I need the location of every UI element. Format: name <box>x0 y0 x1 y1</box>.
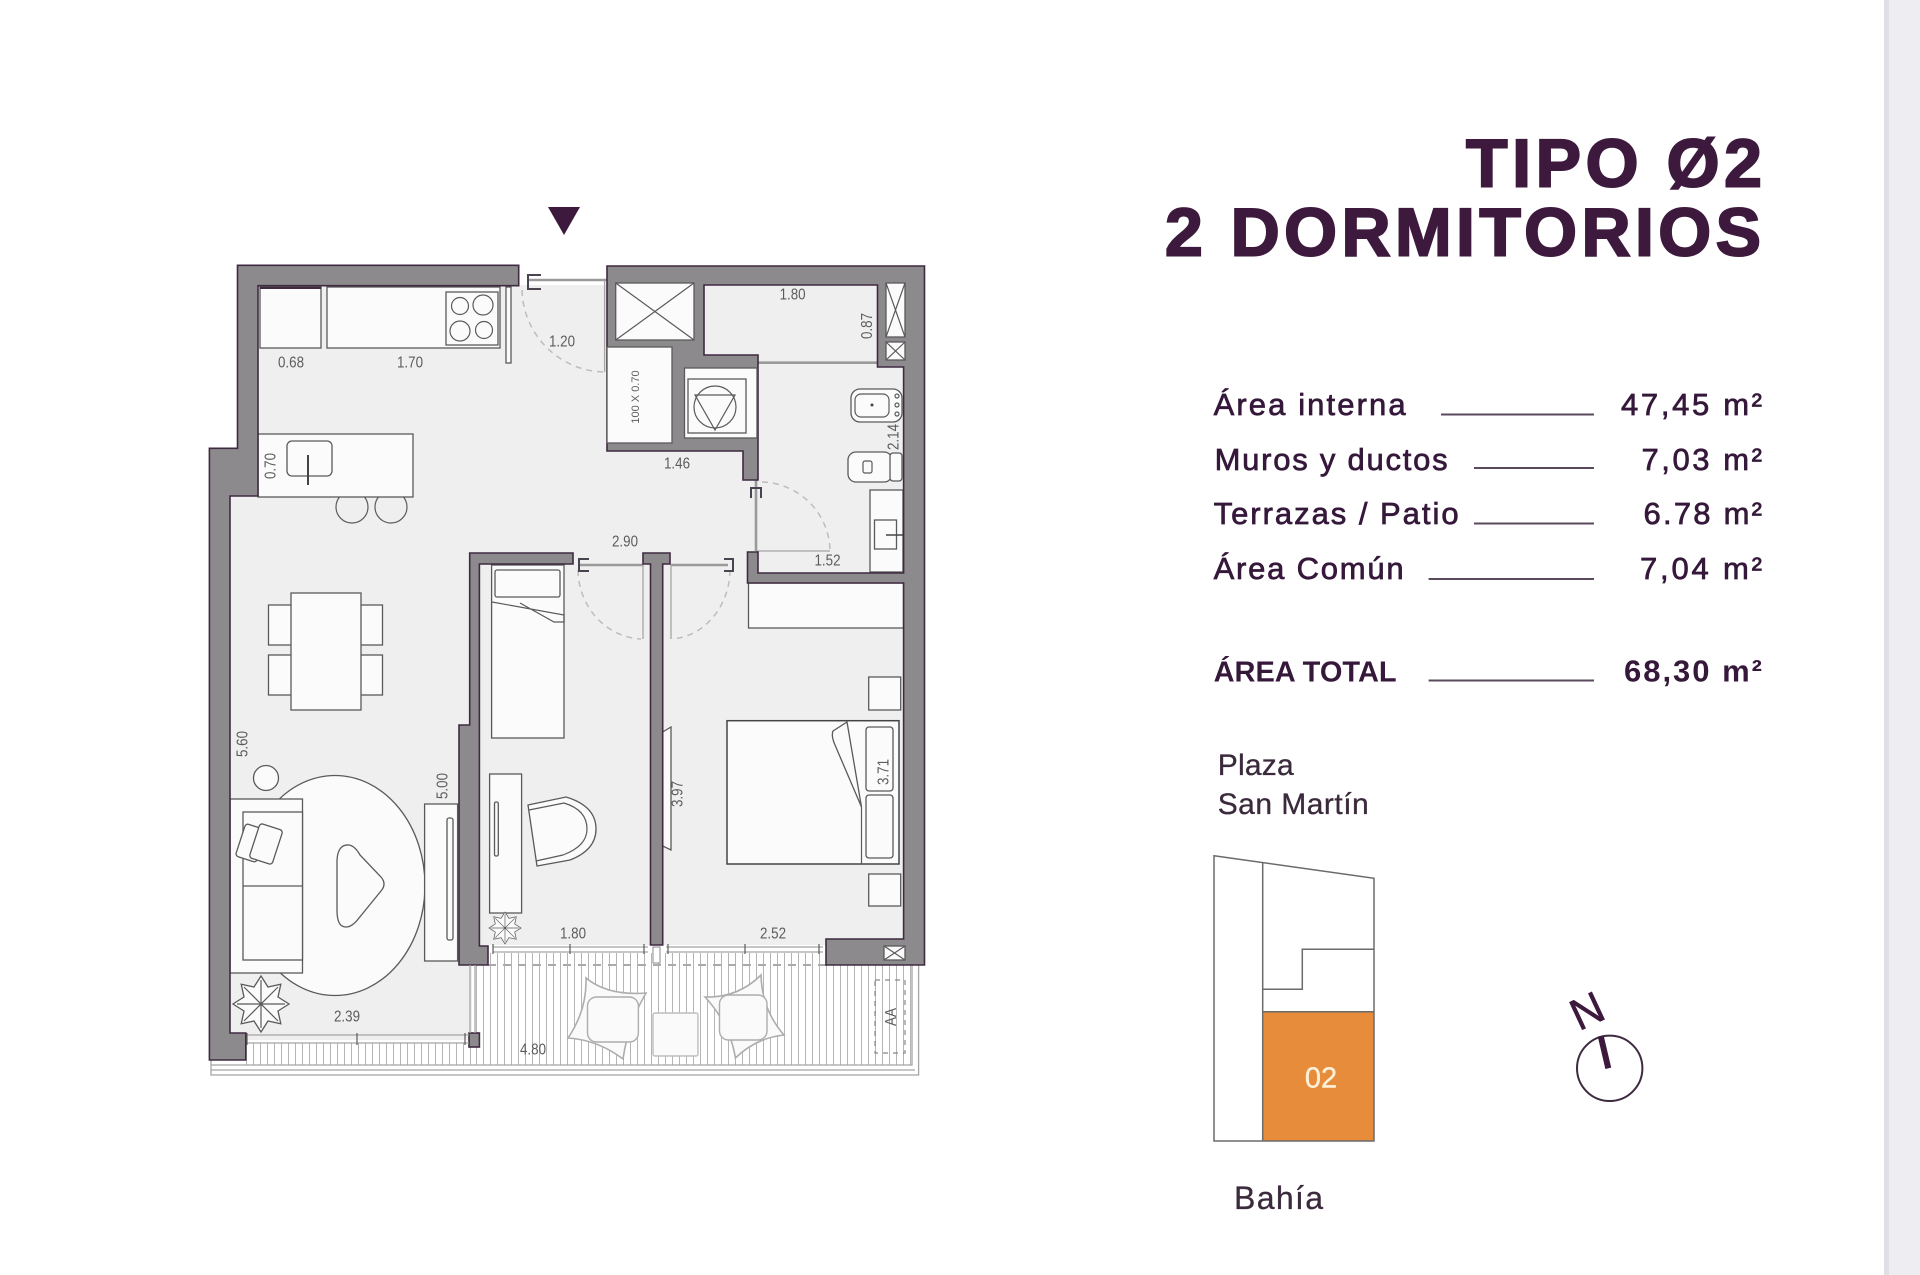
round rug and coffee table <box>245 776 425 996</box>
dimension labels: 1.80 <box>780 286 806 304</box>
floor plan <box>209 265 924 1075</box>
dimension labels: 2.90 <box>612 534 638 550</box>
title: TIPO Ø2 <box>1466 126 1762 202</box>
row: area comun: 7,04 m² <box>1640 551 1762 586</box>
row: terrazas: Terrazas / Patio <box>1214 496 1459 531</box>
row: terrazas <box>1214 496 1762 531</box>
dimension labels: 1.70 <box>397 354 423 372</box>
row: area total <box>1214 654 1762 688</box>
terrace furniture <box>568 975 905 1059</box>
row: area interna: 47,45 m² <box>1621 387 1762 422</box>
dimension labels: 5.60 <box>234 731 252 757</box>
dimension labels: 0.87 <box>859 313 876 339</box>
dimension labels: 1.46 <box>664 456 690 472</box>
dimension labels: 3.97 <box>670 781 686 807</box>
windows <box>247 944 823 1045</box>
dimension labels: AA <box>883 1008 900 1026</box>
row: area comun <box>1214 551 1762 586</box>
bathroom fixtures <box>848 389 903 572</box>
plant bedroom <box>489 912 521 944</box>
row: area total: ÁREA TOTAL <box>1214 654 1397 688</box>
dimension labels: 1.80 <box>560 926 586 942</box>
location label: plaza: Plaza <box>1218 749 1294 782</box>
area table <box>1214 387 1762 688</box>
kitchen island with sink and stools <box>258 434 413 523</box>
north compass <box>1562 983 1642 1101</box>
dimension labels <box>234 286 902 1058</box>
location label: plaza <box>1218 749 1369 821</box>
sofa <box>230 799 302 973</box>
floor lamp <box>254 766 278 790</box>
row: area comun: Área Común <box>1214 551 1404 586</box>
entrance arrow <box>548 207 580 235</box>
dimension labels: 4.80 <box>520 1042 546 1058</box>
dimension labels: 0.70 <box>262 453 280 479</box>
location label: plaza: San Martín <box>1218 788 1369 821</box>
service shafts and closets <box>607 283 905 963</box>
door swings and sliding doors <box>522 275 878 639</box>
dimension labels: 100 X 0.70 <box>630 370 642 424</box>
row: muros y ductos <box>1215 442 1762 477</box>
bedroom wardrobe <box>748 583 904 628</box>
dimension labels: 0.68 <box>278 354 304 372</box>
plant living <box>233 976 289 1032</box>
row: area total: 68,30 m² <box>1624 654 1762 688</box>
dimension labels: 5.00 <box>434 773 452 799</box>
title <box>1165 126 1762 270</box>
TV console <box>425 804 458 961</box>
terrace <box>211 965 919 1075</box>
kitchen furniture <box>260 287 511 363</box>
location label: bahia: Bahía <box>1234 1180 1323 1216</box>
dimension labels: 1.20 <box>549 334 575 350</box>
row: terrazas: 6.78 m² <box>1644 496 1762 531</box>
floor area <box>230 285 903 1040</box>
row: muros y ductos: Muros y ductos <box>1215 442 1448 477</box>
row: area interna: Área interna <box>1214 387 1406 422</box>
walls <box>209 265 924 1060</box>
dimension labels: 1.52 <box>814 552 841 570</box>
dimension labels: 2.52 <box>760 926 786 942</box>
site key map: 02 <box>1305 1062 1337 1094</box>
single bed <box>492 565 564 738</box>
row: area interna <box>1214 387 1762 422</box>
site key map <box>1214 856 1374 1141</box>
right margin band <box>1884 0 1920 1275</box>
dimension labels: 2.14 <box>886 424 902 450</box>
row: muros y ductos: 7,03 m² <box>1642 442 1762 477</box>
dining table and chairs <box>268 593 382 710</box>
desk and chair <box>490 774 596 913</box>
north compass: N <box>1562 983 1612 1040</box>
dimension labels: 3.71 <box>876 759 892 785</box>
double bed with nightstands <box>663 677 901 906</box>
dimension labels: 2.39 <box>334 1008 360 1026</box>
title: 2 DORMITORIOS <box>1165 194 1761 270</box>
